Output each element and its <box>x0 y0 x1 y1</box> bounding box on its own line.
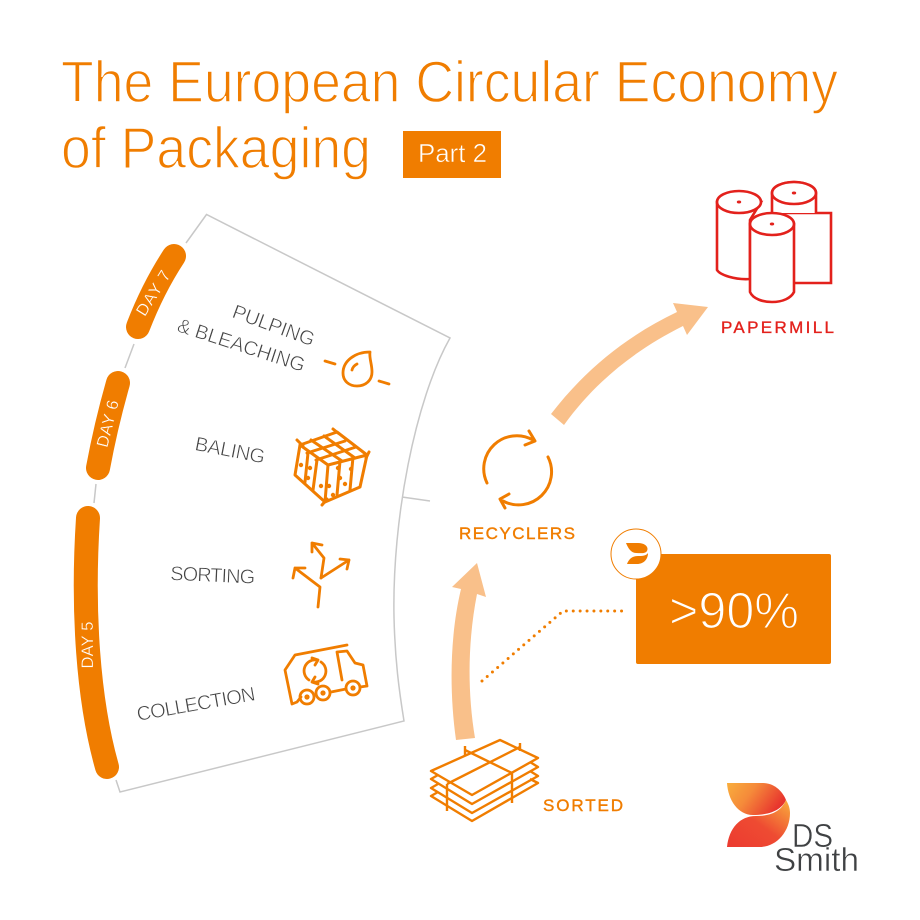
title <box>61 50 838 181</box>
label: sorted: SORTED <box>543 796 623 815</box>
icon: papermill rolls <box>717 182 831 302</box>
logo: DS Smith <box>727 783 859 878</box>
badge: part 2 <box>403 131 501 178</box>
label: pulping and bleaching: PULPING <box>229 301 318 351</box>
icon: DS Smith badge <box>611 529 661 579</box>
panel: process timeline outline <box>94 214 450 792</box>
pill: day 7: DAY 7 <box>133 267 175 319</box>
title: of Packaging <box>61 116 371 181</box>
pill: day 5: DAY 5 <box>79 622 97 668</box>
icon: recycling arrows <box>484 431 552 508</box>
label: pulping and bleaching: & BLEACHING <box>174 315 308 377</box>
label: recyclers: RECYCLERS <box>459 524 575 543</box>
icon: collection truck <box>285 645 367 704</box>
label: collection: COLLECTION <box>135 683 257 726</box>
pill: day 5 <box>79 518 107 767</box>
icon: bale <box>295 429 369 505</box>
callout: greater than 90 percent: >90% <box>669 582 799 639</box>
label: papermill: PAPERMILL <box>721 318 834 337</box>
icon: sorted paper stack <box>431 740 538 821</box>
pill: day 6: DAY 6 <box>94 398 123 449</box>
callout: greater than 90 percent <box>636 554 831 664</box>
arrow: sorted to recyclers <box>452 563 486 740</box>
icon: sorting arrows <box>293 543 349 607</box>
icon: water drop <box>325 352 389 386</box>
dotted connector <box>482 611 622 681</box>
arrow: recyclers to papermill <box>551 303 708 425</box>
label: sorting: SORTING <box>170 563 256 589</box>
label: baling: BALING <box>193 433 267 468</box>
pill: day 6 <box>94 383 123 468</box>
logo: DS Smith: DS <box>792 817 833 854</box>
title: The European Circular Economy <box>61 50 838 115</box>
badge: part 2: Part 2 <box>418 138 487 168</box>
logo: DS Smith: Smith <box>774 841 859 878</box>
